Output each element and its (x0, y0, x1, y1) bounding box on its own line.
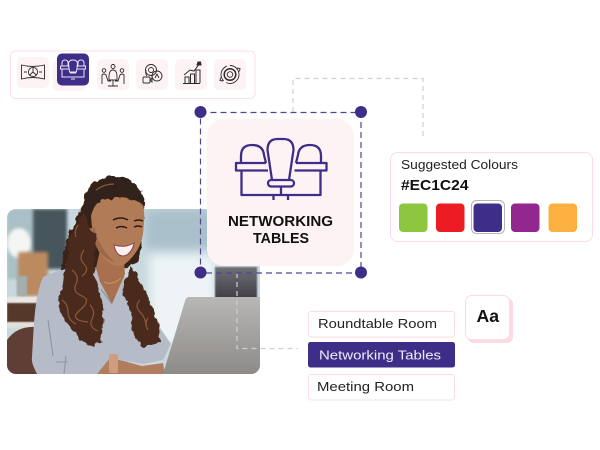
wristwatch (109, 354, 118, 373)
shirt folds (48, 275, 134, 374)
toolbar icon: target cycle (214, 59, 246, 90)
toolbar icon: growth chart (175, 59, 207, 90)
laptop (163, 297, 260, 374)
card title: TABLES (253, 231, 309, 247)
office background photo (7, 209, 260, 374)
hex code: #EC1C24 (401, 177, 469, 194)
dashed connector to colours panel (293, 78, 423, 139)
center card: networking tables (207, 119, 354, 266)
icon: networking table with chairs (236, 139, 326, 200)
card title: NETWORKING (228, 214, 333, 230)
list item: meeting room (308, 374, 454, 400)
list item: networking tables, selected (308, 342, 455, 368)
forearm and hand (97, 358, 165, 374)
selection frame with handles (194, 106, 367, 278)
suggested colours panel (390, 152, 592, 242)
smile (114, 243, 134, 256)
shirt (32, 267, 171, 374)
font sample tile: Aa (476, 306, 499, 326)
face (91, 197, 144, 266)
font sample tile (466, 296, 513, 343)
right curls (123, 266, 160, 347)
ear and earring (89, 228, 92, 232)
list item: meeting room: Meeting Room (317, 379, 414, 394)
list item: networking tables, selected: Networking Tables (319, 348, 442, 362)
icon toolbar panel (10, 51, 255, 98)
infographic canvas (7, 50, 593, 400)
list item: roundtable room: Roundtable Room (318, 316, 437, 331)
colour swatches (399, 200, 577, 234)
necklace (104, 278, 121, 283)
neck and chest (96, 250, 125, 304)
woman working on a laptop (32, 176, 260, 374)
dashed connector to list (237, 273, 298, 348)
toolbar icon: networking tables, selected (53, 54, 89, 91)
toolbar icon: Q and A (136, 59, 168, 90)
toolbar icon: presentation screen (17, 57, 49, 88)
toolbar icon: team meeting (97, 59, 129, 90)
card title (228, 214, 333, 247)
hair highlights (62, 184, 148, 331)
hair behind body (60, 176, 144, 270)
cheek shading (92, 225, 115, 262)
panel label: Suggested Colours (401, 158, 518, 172)
eyes and brows (113, 218, 143, 228)
hair top (84, 176, 145, 224)
name list (308, 312, 455, 400)
list item: roundtable room (308, 312, 454, 337)
left curls (58, 210, 104, 347)
